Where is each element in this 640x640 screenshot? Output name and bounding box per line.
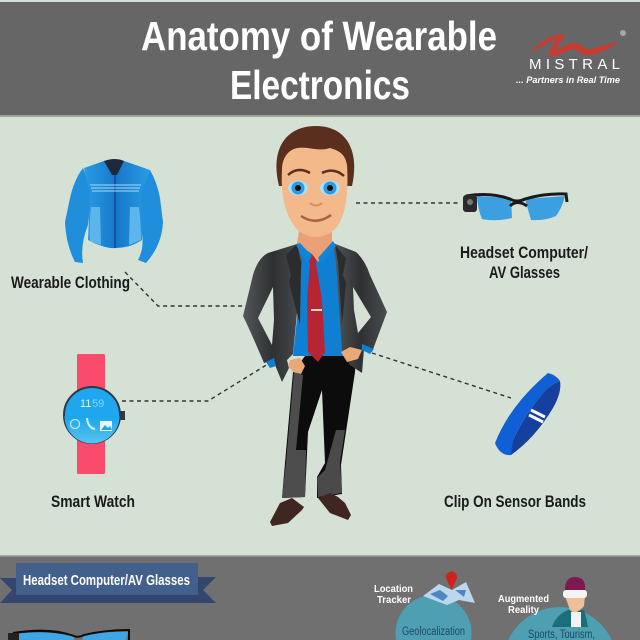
cuffs (266, 344, 374, 368)
label: augmented reality: Augmented (498, 593, 549, 605)
label: location tracker: Location (374, 583, 413, 595)
label: headset computer / AV glasses: AV Glasses (489, 263, 560, 282)
eyes (288, 180, 340, 196)
label: headset computer / AV glasses (460, 243, 588, 282)
logo: Mistral: MISTRAL (529, 56, 620, 73)
ribbon: headset computer heading: Headset Computer/AV Glasses (23, 573, 190, 589)
label: clip on sensor bands: Clip On Sensor Bands (444, 492, 586, 511)
header band (0, 2, 640, 117)
circle: geolocalization (396, 595, 472, 640)
label: augmented reality (498, 593, 549, 616)
circle: geolocalization: Geolocalization (402, 626, 465, 638)
icon: large glasses, cropped (8, 629, 130, 640)
brows and mouth (288, 170, 344, 221)
icon: sensor band (495, 373, 560, 455)
title (141, 13, 497, 108)
label: wearable clothing: Wearable Clothing (11, 273, 130, 292)
connector: band to man (372, 353, 511, 398)
trousers (282, 356, 356, 498)
jacket right (333, 243, 387, 373)
label: smart watch: Smart Watch (51, 492, 135, 511)
face (282, 148, 347, 237)
tie clip (311, 309, 322, 311)
icon: AV glasses (463, 194, 567, 220)
icon: AR person (552, 577, 588, 627)
hair back (276, 126, 354, 186)
icon: jacket (65, 159, 163, 263)
neck (297, 225, 332, 262)
icon: smart watch: 11 (80, 398, 91, 410)
logo: Mistral: ... Partners in Real Time (516, 75, 620, 85)
logo: Mistral (516, 30, 626, 85)
label: augmented reality: Reality (508, 604, 539, 616)
connector: glasses to man (356, 202, 460, 204)
title: Electronics (230, 62, 410, 108)
connector: watch to man (122, 364, 268, 401)
hands (288, 347, 362, 374)
illustration: businessman (243, 126, 387, 526)
shoes (270, 493, 351, 526)
connector: clothing to man (125, 272, 244, 306)
footer band (0, 555, 640, 640)
label: location tracker: Tracker (377, 594, 411, 606)
ribbon: headset computer heading (0, 563, 216, 603)
circle: sports, tourism (508, 607, 612, 640)
jacket left (243, 244, 302, 382)
label: location tracker (374, 583, 413, 606)
icon: smart watch: 59 (92, 398, 104, 410)
icon: map and pin (423, 572, 475, 605)
shirt (293, 242, 343, 356)
icon: smart watch (64, 354, 125, 474)
label: headset computer / AV glasses: Headset Computer/ (460, 243, 588, 262)
tie (307, 254, 325, 362)
title: Anatomy of Wearable (141, 13, 497, 59)
